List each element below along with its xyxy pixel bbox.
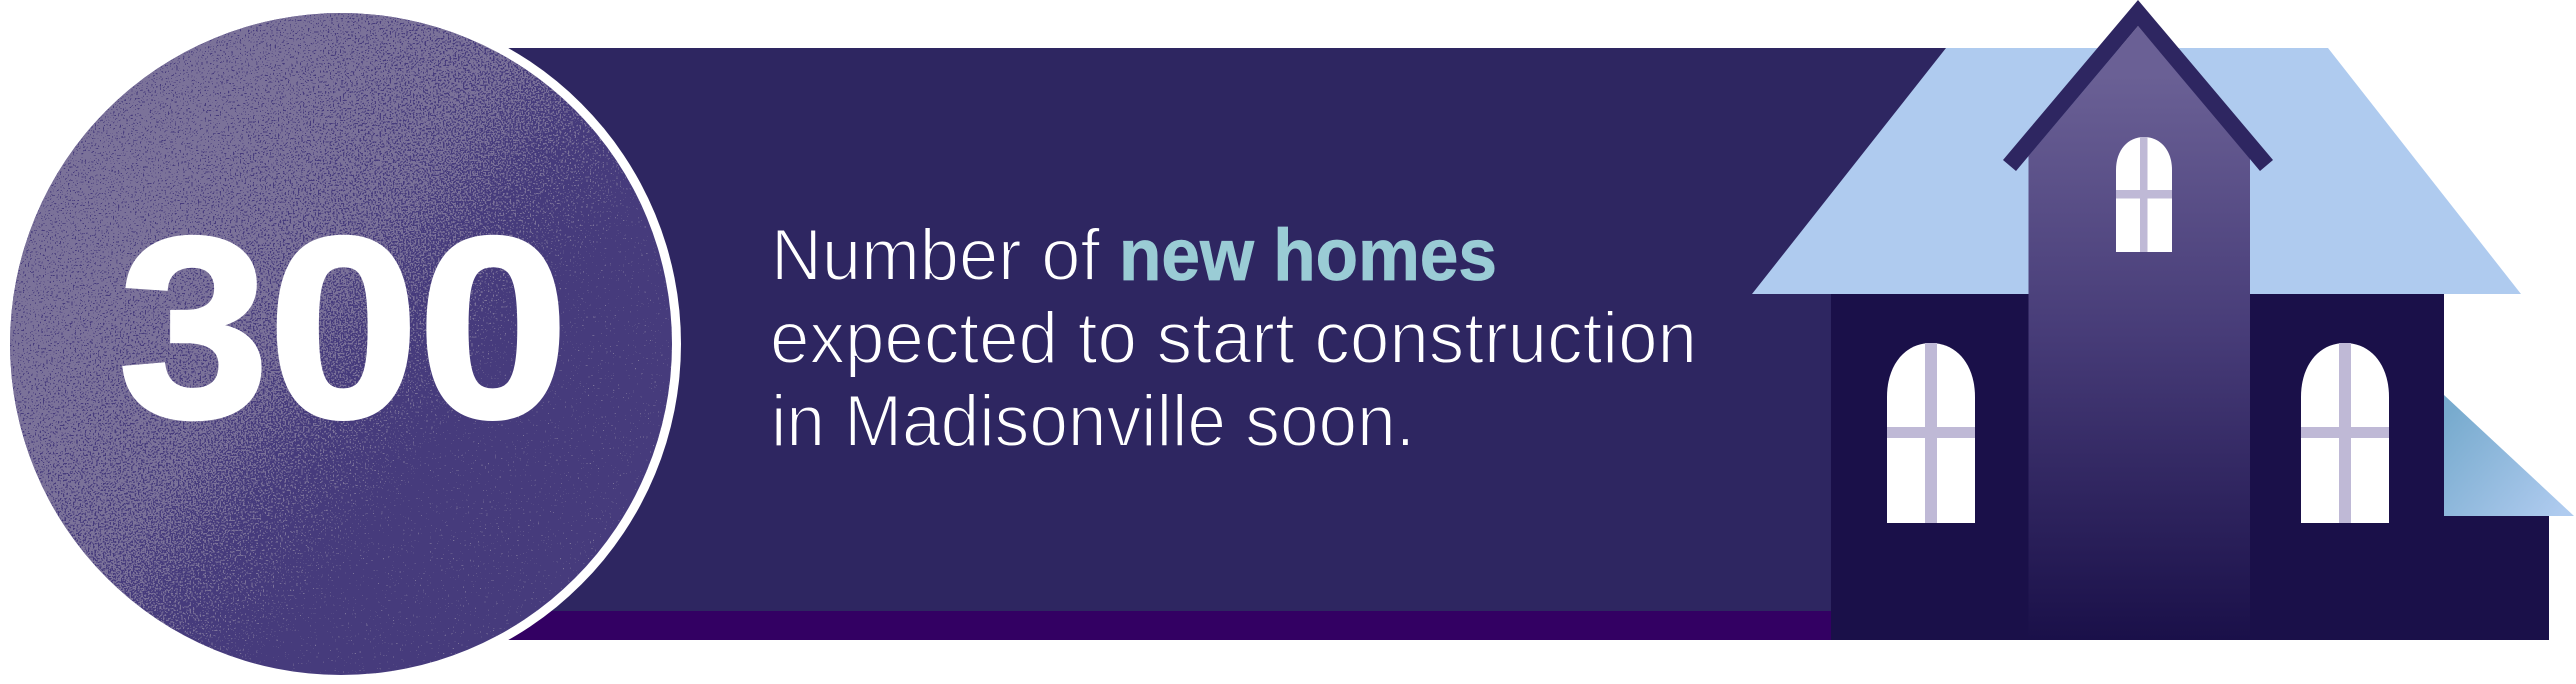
big number 300: 300 <box>119 185 568 471</box>
description text: Number of <box>771 215 1101 296</box>
central tower <box>2028 26 2250 640</box>
description text: in Madisonville soon. <box>771 381 1415 462</box>
description text <box>770 215 1697 462</box>
banner background panel <box>300 48 1960 640</box>
description text: expected to start construction <box>770 298 1697 379</box>
house roof <box>1752 48 2521 294</box>
description text: new homes <box>1119 215 1497 296</box>
tower roof chevron <box>2003 0 2273 171</box>
statistic circle <box>0 0 690 684</box>
tower window <box>2116 137 2172 252</box>
left window <box>1887 343 1975 523</box>
icon: house <box>1752 0 2574 640</box>
right window <box>2301 343 2389 523</box>
house walls <box>1831 294 2549 640</box>
side roof triangle <box>2444 395 2574 516</box>
